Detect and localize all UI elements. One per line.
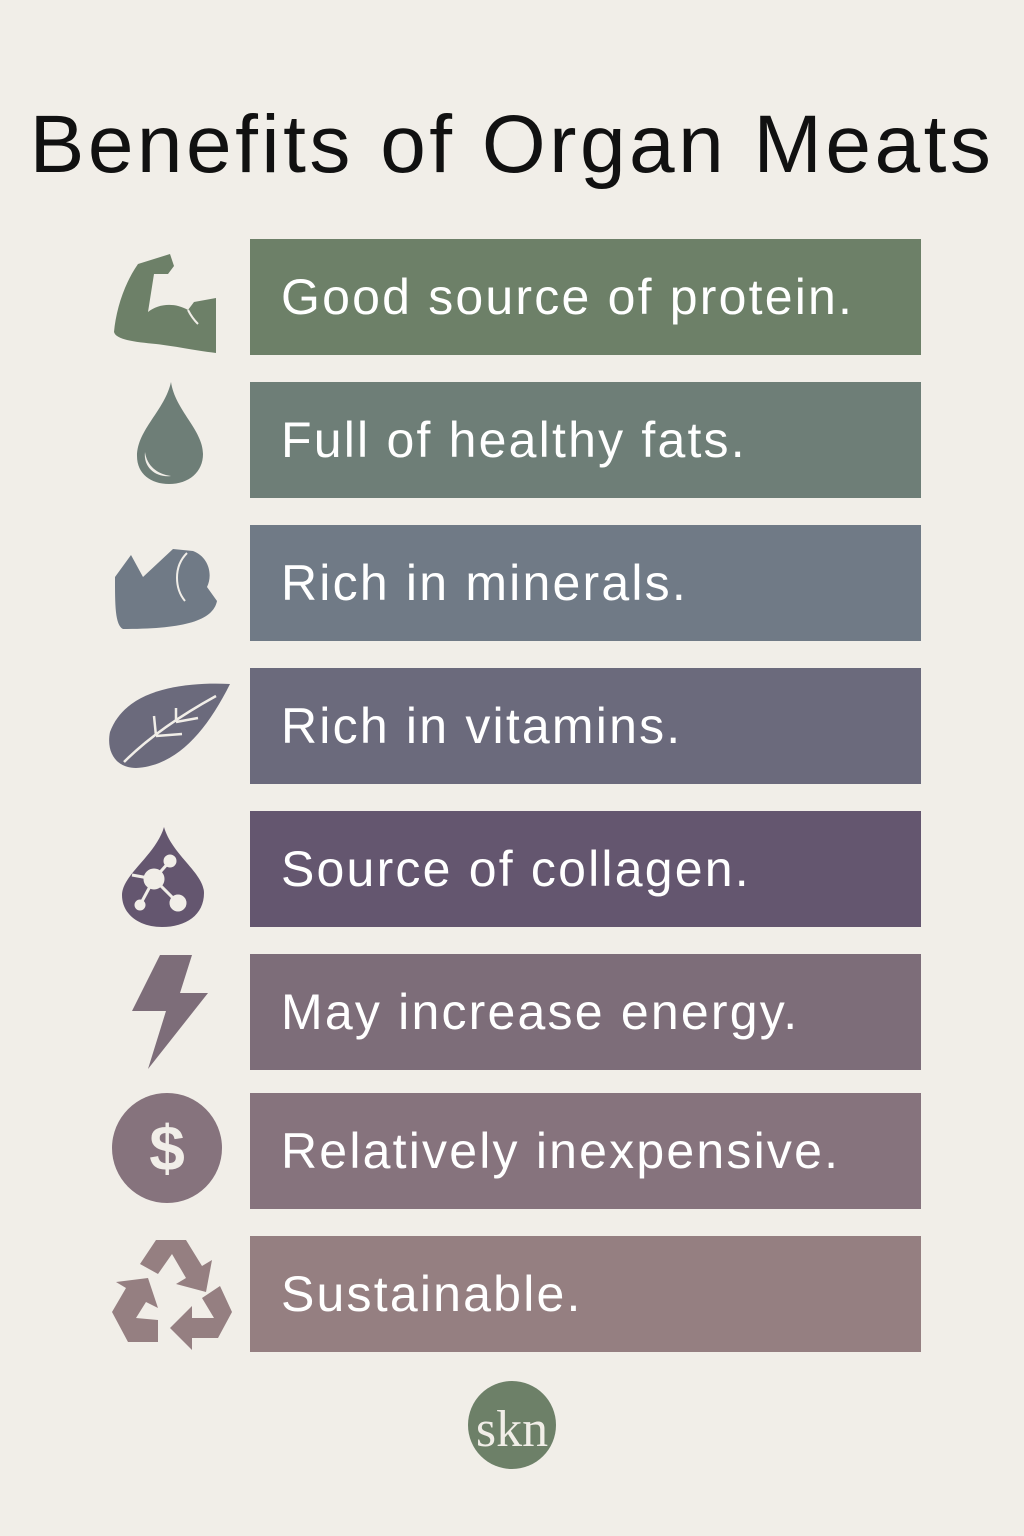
bar: collagen — [250, 811, 921, 927]
bar: protein — [250, 239, 921, 355]
bar: minerals: Rich in minerals. — [281, 555, 688, 611]
bar: protein: Good source of protein. — [281, 269, 854, 325]
icon: dollar coin: $ — [149, 1112, 185, 1184]
bar: vitamins: Rich in vitamins. — [281, 698, 682, 754]
logo: skn — [476, 1401, 548, 1458]
icon: lightning — [132, 955, 208, 1069]
icon: drop — [137, 382, 203, 484]
icon: recycle — [112, 1240, 232, 1350]
icon: rock — [115, 549, 217, 629]
bar: energy: May increase energy. — [281, 984, 799, 1040]
bar: vitamins — [250, 668, 921, 784]
logo — [468, 1381, 556, 1469]
bar: collagen: Source of collagen. — [281, 841, 751, 897]
bar: inexpensive: Relatively inexpensive. — [281, 1123, 840, 1179]
bar: inexpensive — [250, 1093, 921, 1209]
icon: flexed arm — [114, 254, 216, 353]
bar: fats — [250, 382, 921, 498]
bar: fats: Full of healthy fats. — [281, 412, 747, 468]
bar: minerals — [250, 525, 921, 641]
icon: leaf — [109, 684, 230, 768]
title: Benefits of Organ Meats — [30, 99, 994, 190]
bar: energy — [250, 954, 921, 1070]
bar: sustainable — [250, 1236, 921, 1352]
bar: sustainable: Sustainable. — [281, 1266, 583, 1322]
icon: dollar coin — [112, 1093, 222, 1203]
icon: collagen drop — [122, 827, 204, 927]
